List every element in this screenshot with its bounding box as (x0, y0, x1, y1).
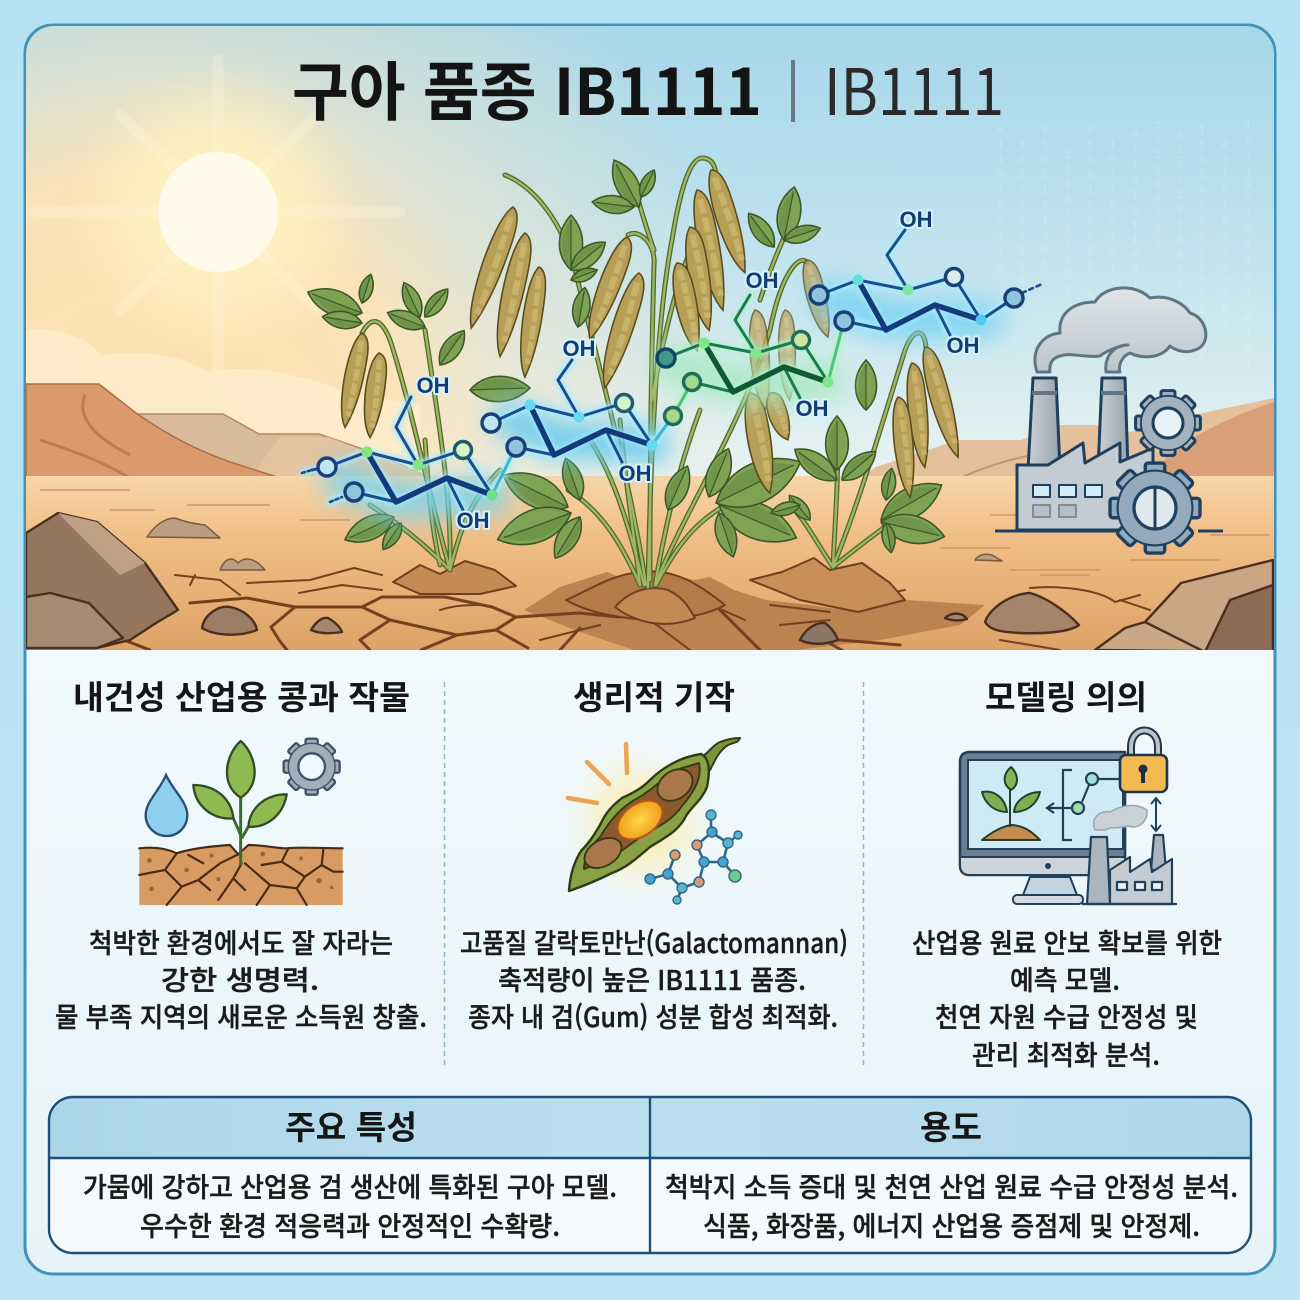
ring 1: OH (456, 508, 490, 533)
molecule glow (340, 300, 985, 500)
description: 물 부족 지역의 새로운 소득원 창출. (55, 996, 427, 1035)
binary digital rain: 0110101100101 (1084, 125, 1096, 320)
description: 천연 자원 수급 안정성 및 (935, 996, 1198, 1035)
description: 척박한 환경에서도 잘 자라는 (89, 922, 393, 961)
panel: hero scene (26, 26, 1274, 652)
title separator (791, 60, 795, 122)
double arrow (1151, 798, 1161, 831)
binary digital rain: 1011001011 (1106, 140, 1118, 290)
ring 1: OH (416, 373, 450, 398)
ring 3 (657, 268, 844, 424)
heading: 모델링 의의 (985, 671, 1147, 719)
ring 4: OH (900, 207, 932, 232)
column dividers (444, 682, 864, 1068)
panel: physiological mechanism (460, 671, 848, 1035)
title: IB1111 (824, 42, 1004, 134)
description: 고품질 갈락토만난(Galactomannan) (460, 922, 848, 961)
title: 구아 품종 IB1111 (292, 42, 762, 134)
ring 2: OH (562, 336, 596, 361)
glow (562, 744, 718, 900)
ring 2: OH (618, 461, 652, 486)
panel: drought-tolerant crop (55, 671, 427, 1035)
binary digital rain (994, 120, 1254, 375)
model diagram (1047, 770, 1121, 840)
description: 강한 생명력. (161, 959, 319, 998)
brown dirt band (524, 572, 985, 652)
description: 관리 최적화 분석. (972, 1034, 1160, 1073)
galactomannan molecule chain (302, 207, 1042, 533)
gear (284, 739, 340, 795)
screen plant (982, 767, 1040, 840)
table header fill (49, 1097, 1251, 1253)
molecule (645, 810, 742, 904)
seedling (193, 741, 287, 865)
soil block (139, 845, 343, 905)
guar plants (303, 155, 968, 587)
column: key traits: 가뭄에 강하고 산업용 검 생산에 특화된 구아 모델. (83, 1166, 617, 1205)
icon: plant, water drop, gear, soil (139, 739, 343, 905)
icon: factory with gears (995, 288, 1223, 553)
binary digital rain: 10110010110100101 (1242, 120, 1254, 375)
description: 예측 모델. (1010, 959, 1120, 998)
panel: modelling significance (912, 671, 1222, 1073)
column: key traits: 주요 특성 (285, 1101, 417, 1149)
sun (26, 54, 323, 371)
icon: monitor, lock and factory (960, 730, 1177, 904)
ring 4 (810, 207, 1042, 358)
binary digital rain: 101100101 (1152, 120, 1164, 255)
desert ground (26, 476, 1274, 652)
column: key traits (83, 1101, 617, 1244)
description: 축적량이 높은 IB1111 품종. (498, 959, 806, 998)
binary digital rain: 01011010010 (1174, 130, 1186, 295)
title (292, 42, 1004, 134)
chimneys (1028, 378, 1060, 470)
heading: 생리적 기작 (573, 671, 735, 719)
binary digital rain: 0110100110 (994, 125, 1006, 275)
column: uses: 식품, 화장품, 에너지 산업용 증점제 및 안정제. (703, 1205, 1200, 1244)
big right rock (1095, 560, 1273, 652)
small dunes (147, 518, 1002, 570)
ground lines (995, 530, 1223, 532)
summary table (49, 1097, 1251, 1253)
description: 산업용 원료 안보 확보를 위한 (912, 922, 1222, 961)
rocks (26, 513, 1273, 652)
pod (569, 738, 740, 891)
ring 4: OH (946, 333, 980, 358)
column: key traits: 우수한 환경 적응력과 안정적인 수확량. (140, 1205, 560, 1244)
binary digital rain: 0110101100101 (1219, 140, 1231, 335)
binary digital rain: 01101011001 (1129, 130, 1141, 295)
ring 1 (302, 373, 516, 533)
smoke cloud (1035, 288, 1206, 372)
ring 2 (482, 336, 673, 486)
small factory (1082, 835, 1177, 904)
factory windows (1033, 485, 1102, 517)
cracked soil (124, 568, 1150, 652)
small gear (1136, 391, 1200, 455)
water drop (146, 775, 187, 836)
column: uses (665, 1101, 1238, 1244)
big left rock (26, 513, 178, 648)
ring 3: OH (796, 396, 828, 421)
ring 3: OH (746, 268, 778, 293)
description (55, 922, 427, 1035)
haze clouds on the horizon (26, 329, 420, 470)
monitor (960, 752, 1125, 904)
binary digital rain: 10110010101 (1016, 140, 1028, 305)
smoke (1094, 806, 1147, 830)
description: 종자 내 검(Gum) 성분 합성 최적화. (468, 996, 838, 1035)
factory building (1017, 443, 1153, 530)
soil mounds (393, 558, 905, 624)
mid right rock (985, 593, 1079, 633)
distant hills (26, 384, 1274, 478)
binary digital rain: 1101001011010110 (1196, 125, 1208, 365)
sky (26, 26, 1274, 486)
binary digital rain: 0101101001 (1039, 125, 1051, 275)
table lines (49, 1097, 1251, 1253)
binary digital rain: 1100101101 (1062, 150, 1074, 300)
large gear (1110, 463, 1200, 553)
padlock (1120, 730, 1167, 792)
icon: glowing guar pod with molecule (562, 738, 742, 904)
description (912, 922, 1222, 1073)
plant leaves (303, 155, 949, 563)
column: uses: 용도 (920, 1101, 982, 1149)
column: uses: 척박지 소득 증대 및 천연 산업 원료 수급 안정성 분석. (665, 1166, 1238, 1205)
guar pods (336, 167, 968, 498)
ground streaks (40, 490, 1270, 575)
plant stems (362, 158, 926, 587)
rays (568, 744, 627, 803)
heading: 내건성 산업용 콩과 작물 (73, 671, 410, 719)
description (460, 922, 848, 1035)
